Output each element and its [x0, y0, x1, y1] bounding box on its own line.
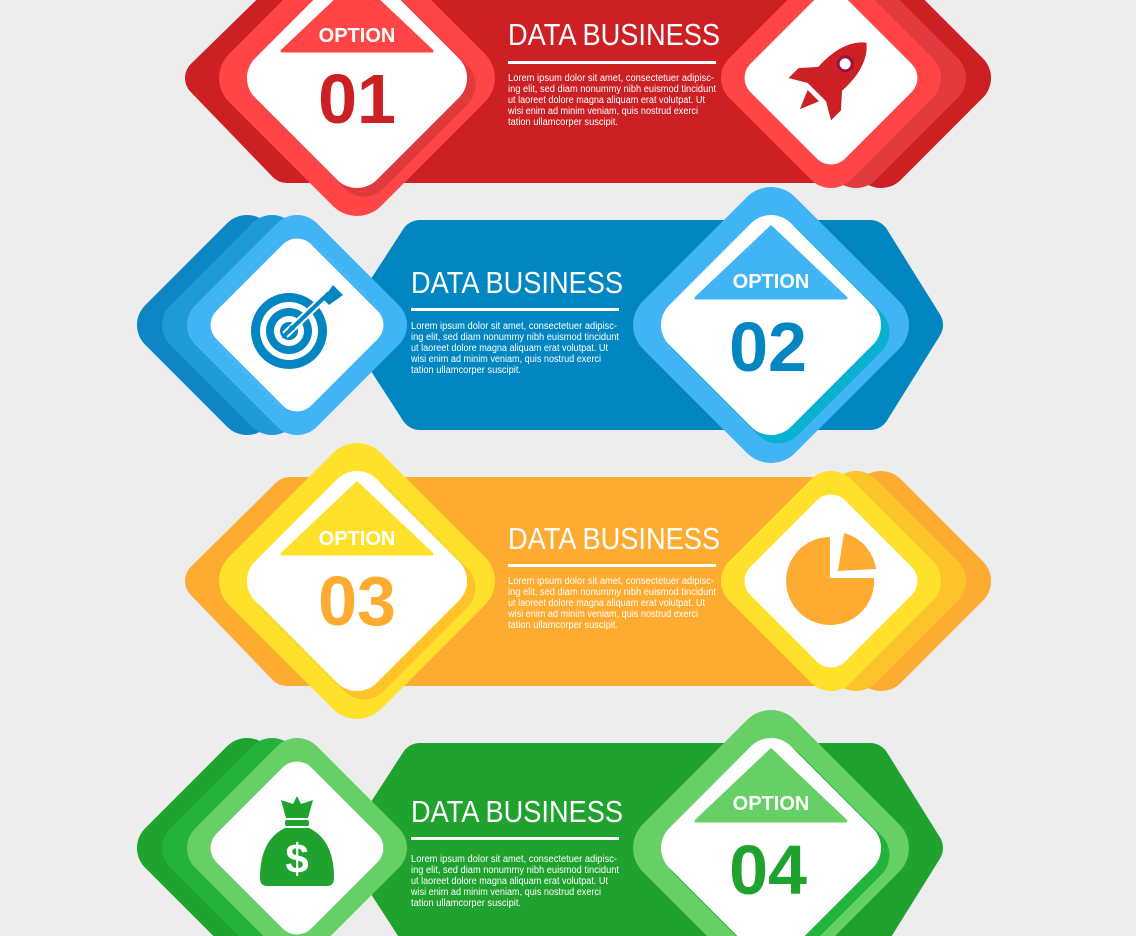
text block: tation ullamcorper suscipit. — [411, 365, 521, 376]
option diamond 01: OPTION — [319, 25, 395, 47]
text block: wisi enim ad minim veniam, quis nostrud exerci — [410, 354, 601, 365]
row 4: option 04 green — [125, 696, 923, 936]
option diamond 02: 02 — [729, 308, 807, 386]
option diamond 03 — [205, 429, 509, 733]
option diamond 03: OPTION — [319, 528, 395, 550]
text block: DATA BUSINESS — [411, 265, 623, 300]
option diamond 04: OPTION — [733, 793, 809, 815]
text block: ing elit, sed diam nonummy nibh euismod tincidunt — [411, 332, 619, 343]
band blue — [365, 240, 923, 410]
text block: tation ullamcorper suscipit. — [508, 117, 618, 128]
text block: Lorem ipsum dolor sit amet, consectetuer adipisc- — [508, 73, 714, 84]
text block: wisi enim ad minim veniam, quis nostrud exerci — [507, 609, 698, 620]
option diamond 04 — [619, 696, 923, 936]
text block: Lorem ipsum dolor sit amet, consectetuer adipisc- — [411, 854, 617, 865]
text block: tation ullamcorper suscipit. — [411, 898, 521, 909]
text block: ut laoreet dolore magna aliquam erat volutpat. Ut — [508, 95, 705, 106]
text block: DATA BUSINESS — [508, 17, 720, 52]
band green — [365, 763, 923, 933]
text block: wisi enim ad minim veniam, quis nostrud exerci — [410, 887, 601, 898]
text block: DATA BUSINESS — [411, 794, 623, 829]
text block: ing elit, sed diam nonummy nibh euismod tincidunt — [508, 587, 716, 598]
text block: ut laoreet dolore magna aliquam erat volutpat. Ut — [411, 876, 608, 887]
text block: tation ullamcorper suscipit. — [508, 620, 618, 631]
row 3: option 03 orange — [205, 429, 1003, 733]
text block: wisi enim ad minim veniam, quis nostrud exerci — [507, 106, 698, 117]
text block: Lorem ipsum dolor sit amet, consectetuer adipisc- — [508, 576, 714, 587]
option diamond 02 — [619, 173, 923, 477]
text block: Lorem ipsum dolor sit amet, consectetuer adipisc- — [411, 321, 617, 332]
icon diamond stack: money bag: $ — [285, 835, 309, 882]
row 2: option 02 blue — [125, 173, 923, 477]
text block — [410, 265, 623, 376]
text block: ut laoreet dolore magna aliquam erat volutpat. Ut — [508, 598, 705, 609]
option diamond 03: 03 — [318, 562, 396, 640]
icon diamond stack: money bag — [125, 726, 419, 936]
option diamond 01: 01 — [318, 60, 396, 138]
text block: ing elit, sed diam nonummy nibh euismod tincidunt — [411, 865, 619, 876]
icon diamond stack: target — [125, 203, 419, 447]
option diamond 04: 04 — [729, 831, 807, 909]
text block — [507, 521, 720, 631]
text block: DATA BUSINESS — [508, 521, 720, 556]
icon diamond stack: rocket — [709, 0, 1003, 200]
text block — [507, 17, 720, 128]
text block — [410, 794, 623, 909]
option diamond 02: OPTION — [733, 271, 809, 293]
icon diamond stack: pie chart — [709, 459, 1003, 703]
text block: ut laoreet dolore magna aliquam erat volutpat. Ut — [411, 343, 608, 354]
band red — [205, 0, 860, 163]
text block: ing elit, sed diam nonummy nibh euismod tincidunt — [508, 84, 716, 95]
band orange — [205, 497, 860, 666]
option diamond 01 — [205, 0, 509, 230]
row 1: option 01 red — [205, 0, 1003, 230]
